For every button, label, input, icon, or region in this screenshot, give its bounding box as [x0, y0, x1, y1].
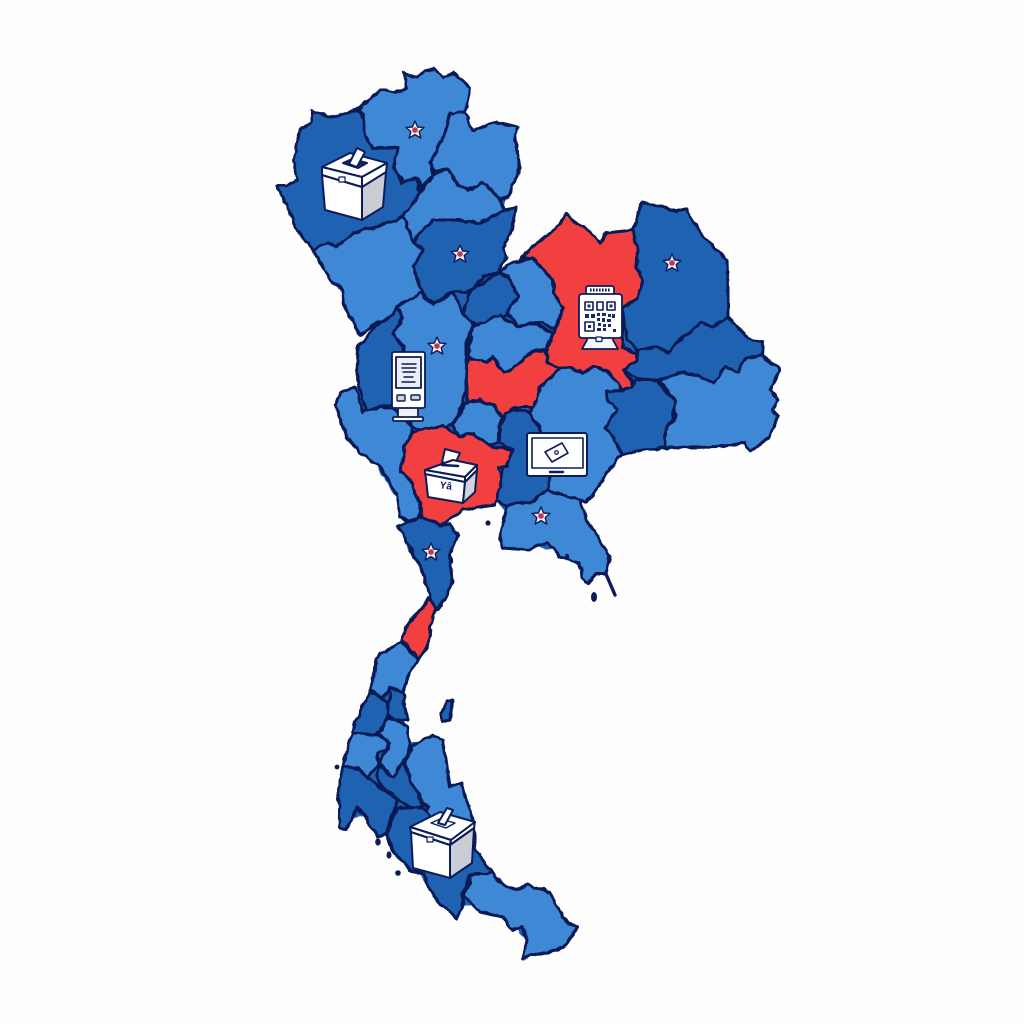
icon: star south-east: [532, 507, 550, 524]
region: west dark: [357, 307, 403, 412]
icon: tablet voting screen: [527, 433, 587, 476]
map of Thailand regions: [276, 68, 780, 958]
region: south east-coast light: [405, 735, 475, 850]
region: central east light: [530, 367, 622, 502]
region: western long light: [335, 387, 422, 523]
icon: voting kiosk: [392, 352, 425, 421]
region: deep south dark: [387, 808, 493, 918]
region: north centre light: [358, 68, 470, 188]
region: Bangkok red: [400, 425, 512, 525]
icon: ballot box north: [322, 148, 387, 220]
region: south middle dark: [378, 762, 423, 808]
region: north-east dark: [622, 203, 728, 353]
region: south 1 light: [370, 642, 418, 698]
ballot box label: Yâ: [439, 480, 453, 493]
region: lower north light: [403, 168, 505, 242]
region: south left dark: [352, 692, 388, 735]
icon: star isthmus: [422, 543, 440, 560]
region: south-east coast light: [500, 490, 610, 583]
icon: star central: [428, 337, 446, 354]
region: small central light: [453, 400, 502, 445]
region: central west light: [393, 293, 473, 433]
icon: star upper centre: [451, 245, 469, 262]
region: isthmus dark: [398, 517, 458, 610]
icon: QR code terminal: [579, 286, 622, 349]
region: south small dark: [387, 687, 408, 720]
icon: ballot box Bangkok: [425, 449, 477, 503]
region: central dark: [495, 408, 550, 505]
icon: star north-east: [663, 254, 681, 271]
region: south-east dark: [605, 380, 675, 455]
region: light above red band: [468, 315, 553, 372]
region: central red band: [465, 350, 560, 417]
region: west large light: [313, 217, 423, 335]
region: east dark band: [623, 317, 763, 383]
region: lower north dark: [413, 208, 515, 305]
region: north-west dark: [276, 110, 420, 250]
icon: ballot box south: [410, 808, 475, 878]
icon: star north: [406, 121, 424, 138]
small islands: [335, 520, 615, 876]
underlay: northern and central land: [300, 85, 770, 598]
region: small dark: [462, 273, 518, 327]
region: south-west dark: [338, 767, 398, 837]
region: far east light: [660, 355, 780, 452]
region: north-east of north light: [430, 112, 520, 200]
region: north-east red: [520, 215, 643, 390]
region: island: [442, 700, 452, 722]
region: south middle light: [378, 718, 410, 777]
region: far south light: [463, 873, 577, 958]
region: south left light: [343, 733, 390, 777]
region: light beside red north-east: [498, 258, 563, 330]
region: isthmus red: [402, 598, 437, 660]
underlay: southern land: [345, 650, 570, 945]
